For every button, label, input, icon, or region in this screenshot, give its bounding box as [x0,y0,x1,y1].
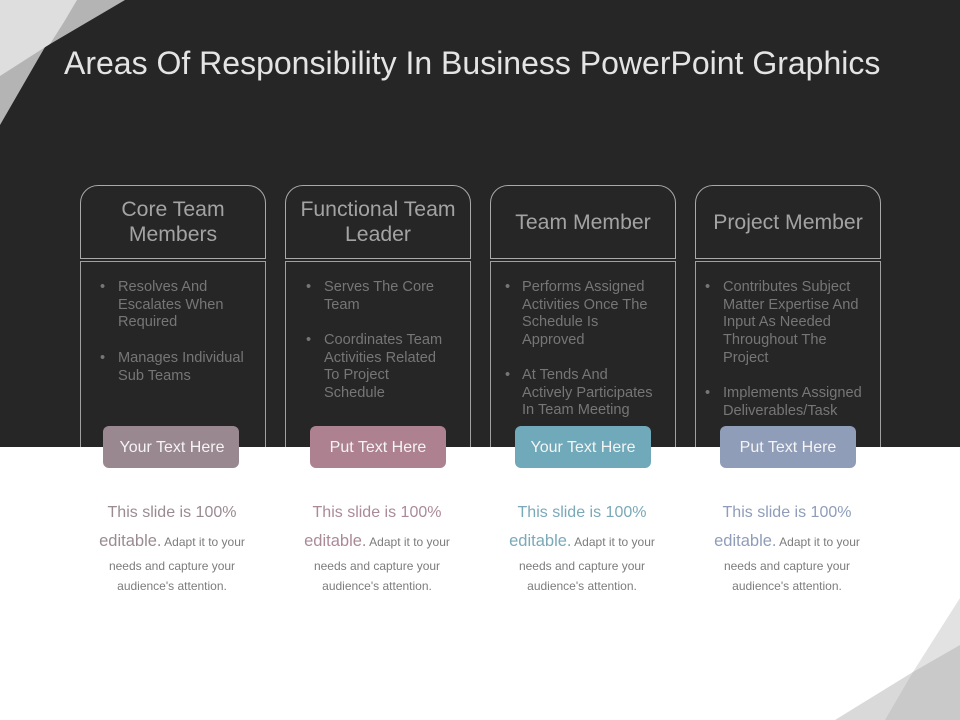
text block: note 4 [714,504,860,593]
bullet list: team member: Activities Once The [522,297,647,313]
text block: note 4: needs and capture your [724,559,850,573]
text block: note 2: needs and capture your [314,559,440,573]
text block: note 1: audience's attention. [117,579,227,593]
bullet list: team member: At Tends And [522,367,608,383]
bullet list: core team members: Manages Individual [118,350,244,366]
bullet list: core team members: Sub Teams [118,368,191,384]
text block: note 2 [304,504,450,593]
bullet list: project member: • [705,385,710,401]
heading: functional team leader: Leader [345,223,411,246]
text block: note 1: needs and capture your [109,559,235,573]
heading: core team members [80,185,266,259]
bullet list: project member: • [705,279,710,295]
bullet list: core team members: Escalates When [118,297,223,313]
button: put text here: Put Text Here [740,439,836,456]
heading: functional team leader: Functional Team [300,198,456,221]
bullet list: team member: • [505,279,510,295]
text block: note 3: needs and capture your [519,559,645,573]
bullet list: team member: Performs Assigned [522,279,644,295]
bullet list: core team members [80,261,266,447]
text block: note 3: This slide is 100% [518,504,646,521]
bullet list: functional team leader: Activities Related [324,350,436,366]
text block: note 2: This slide is 100% [313,504,441,521]
text block: note 3 [509,504,655,593]
panel: core team members [80,185,266,468]
panel: functional team leader [285,185,471,468]
button: put text here [720,426,856,468]
bullet list: project member: Project [723,350,768,366]
bullet list: team member: • [505,367,510,383]
bullet list: core team members: • [100,279,105,295]
bullet list: functional team leader: Team [324,297,360,313]
button: your text here: Your Text Here [531,439,635,456]
bullet list: team member: Schedule Is [522,314,598,330]
bullet list: team member: In Team Meeting [522,402,630,418]
bullet list: functional team leader [285,261,471,447]
panel: team member [490,185,676,468]
bullet list: project member [695,261,881,447]
button: put text here [310,426,446,468]
text block: note 2: editable. Adapt it to your [304,532,450,550]
bullet list: project member: Implements Assigned [723,385,862,401]
heading: project member [695,185,881,259]
button: put text here: Put Text Here [330,439,426,456]
bullet list: functional team leader: • [306,279,311,295]
dark background band [0,0,960,447]
text block: note 2: audience's attention. [322,579,432,593]
text block: note 1: This slide is 100% [108,504,236,521]
bullet list: functional team leader: To Project [324,367,389,383]
heading: functional team leader [285,185,471,259]
heading: project member: Project Member [713,211,863,234]
text block: note 4: This slide is 100% [723,504,851,521]
heading: core team members: Core Team [121,198,225,221]
text block: note 1: editable. Adapt it to your [99,532,245,550]
bullet list: core team members: Required [118,314,177,330]
heading: team member [490,185,676,259]
bullet list: functional team leader: Serves The Core [324,279,434,295]
bullet list: team member: Actively Participates [522,385,653,401]
text block: note 1 [99,504,245,593]
bullet list: project member: Matter Expertise And [723,297,858,313]
bullet list: core team members: Resolves And [118,279,207,295]
panel: project member [695,185,881,468]
bullet list: functional team leader: • [306,332,311,348]
heading: core team members: Members [129,223,217,246]
bullet list: project member: Deliverables/Task [723,403,837,419]
button: your text here [103,426,239,468]
bullet list: functional team leader: Coordinates Team [324,332,442,348]
text block: note 3: editable. Adapt it to your [509,532,655,550]
bullet list: team member: Approved [522,332,584,348]
button: your text here: Your Text Here [120,439,224,456]
text block: note 3: audience's attention. [527,579,637,593]
bullet list: team member [490,261,676,447]
text block: note 4: audience's attention. [732,579,842,593]
text block: note 4: editable. Adapt it to your [714,532,860,550]
bullet list: project member: Input As Needed [723,314,831,330]
decorative corner shapes: top left [0,0,125,125]
title: Areas Of Responsibility In Business PowerPoint Graphics [64,45,880,81]
bullet list: project member: Throughout The [723,332,827,348]
button: your text here [515,426,651,468]
bullet list: functional team leader: Schedule [324,385,385,401]
decorative corner shapes: bottom right [835,598,960,720]
heading: team member: Team Member [515,211,651,234]
bullet list: core team members: • [100,350,105,366]
bullet list: project member: Contributes Subject [723,279,850,295]
